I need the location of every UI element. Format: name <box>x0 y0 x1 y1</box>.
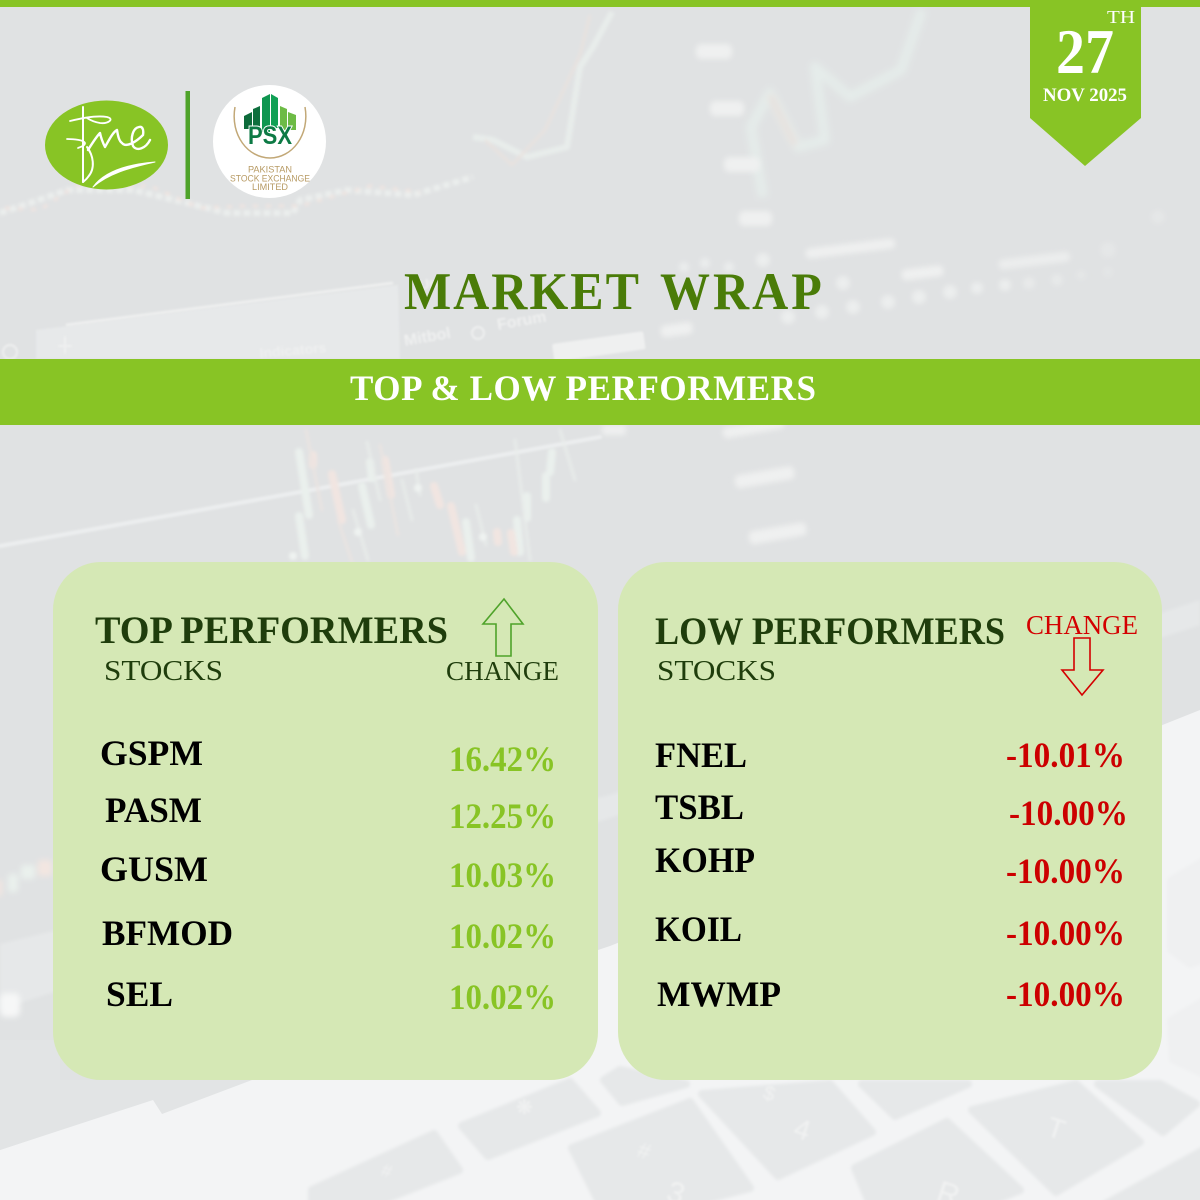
date month and year: NOV 2025 <box>1043 85 1127 106</box>
row: MWMP <box>657 974 1125 1014</box>
background: blurred trading chart and laptop keyboard: Indicators <box>259 339 327 361</box>
row: KOIL <box>655 909 1125 953</box>
row: PASM <box>105 790 556 836</box>
trading UI strip <box>36 285 400 359</box>
key legends: # <box>379 1160 394 1182</box>
date number: 27 <box>1056 17 1114 87</box>
panel: top performers <box>53 562 598 1080</box>
key legends: T <box>1043 1111 1069 1146</box>
logo: PSX: PSX <box>248 122 292 150</box>
blurred chart labels <box>602 44 1071 545</box>
background: blurred trading chart and laptop keyboard: Forum <box>496 309 548 334</box>
row: PASM: PASM <box>105 790 202 830</box>
row: SEL <box>106 974 556 1017</box>
row: GUSM: GUSM <box>100 849 208 889</box>
row: SEL: 10.02% <box>449 977 556 1017</box>
row: GSPM: 16.42% <box>449 739 556 779</box>
row: BFMOD: 10.02% <box>449 916 556 956</box>
logo: PSX: LIMITED <box>252 182 288 192</box>
logo divider <box>186 91 190 199</box>
logo: FNE <box>45 100 168 190</box>
top green strip <box>0 0 1200 7</box>
row: MWMP: MWMP <box>657 974 781 1014</box>
background: blurred trading chart and laptop keyboard: Mitbol <box>403 325 452 350</box>
row: TSBL <box>655 787 1128 833</box>
background: blurred trading chart and laptop keyboard: Urd <box>418 273 444 293</box>
laptop body light area <box>0 710 1200 1200</box>
row: BFMOD: BFMOD <box>102 913 233 953</box>
date ribbon <box>1030 0 1141 166</box>
row: TSBL: TSBL <box>655 787 744 827</box>
row: MWMP: -10.00% <box>1006 974 1125 1014</box>
chart lines <box>0 437 600 546</box>
key legends: $ <box>760 1082 778 1106</box>
key legends <box>379 1082 1069 1200</box>
key legends: 4 <box>790 1112 815 1147</box>
row: KOHP: KOHP <box>655 840 755 880</box>
title: WRAP <box>660 263 825 321</box>
candlesticks top trace <box>0 10 922 213</box>
row: KOHP <box>655 840 1125 891</box>
panel: low performers <box>618 562 1162 1080</box>
row: GSPM: GSPM <box>100 733 203 773</box>
banner heading: TOP & LOW PERFORMERS <box>350 368 816 408</box>
row: FNEL: FNEL <box>655 735 747 775</box>
icon: up arrow <box>483 599 523 656</box>
change column label: CHANGE <box>1026 610 1138 640</box>
change column label: CHANGE <box>446 656 559 686</box>
row: GUSM <box>100 849 556 895</box>
title: MARKET <box>404 263 641 321</box>
row: GUSM: 10.03% <box>449 855 556 895</box>
logo: PSX: PAKISTAN <box>248 164 292 174</box>
icon: down arrow <box>1062 638 1103 695</box>
key legends: ❋ <box>516 1097 533 1119</box>
row: TSBL: -10.00% <box>1009 793 1128 833</box>
stocks column label: STOCKS <box>104 655 223 687</box>
row: PASM: 12.25% <box>449 796 556 836</box>
row: FNEL <box>655 735 1125 775</box>
banner <box>0 359 1200 425</box>
row: BFMOD <box>102 913 556 956</box>
row: SEL: SEL <box>106 974 173 1014</box>
stocks column label: STOCKS <box>657 655 776 687</box>
row: KOHP: -10.00% <box>1006 851 1125 891</box>
date superscript: TH <box>1107 7 1135 27</box>
logo: PSX: STOCK EXCHANGE <box>230 174 310 184</box>
candlesticks lower <box>289 430 575 562</box>
left candle dots <box>0 860 52 896</box>
row: GSPM <box>100 733 556 779</box>
panel heading: TOP PERFORMERS <box>95 609 448 652</box>
row: KOIL: -10.00% <box>1006 913 1125 953</box>
panel heading: LOW PERFORMERS <box>655 610 1005 653</box>
row: KOIL: KOIL <box>655 909 742 949</box>
key legends: # <box>634 1137 655 1165</box>
row: FNEL: -10.01% <box>1006 735 1125 775</box>
logo: PSX <box>213 85 326 198</box>
keyboard keys <box>312 1070 1200 1200</box>
